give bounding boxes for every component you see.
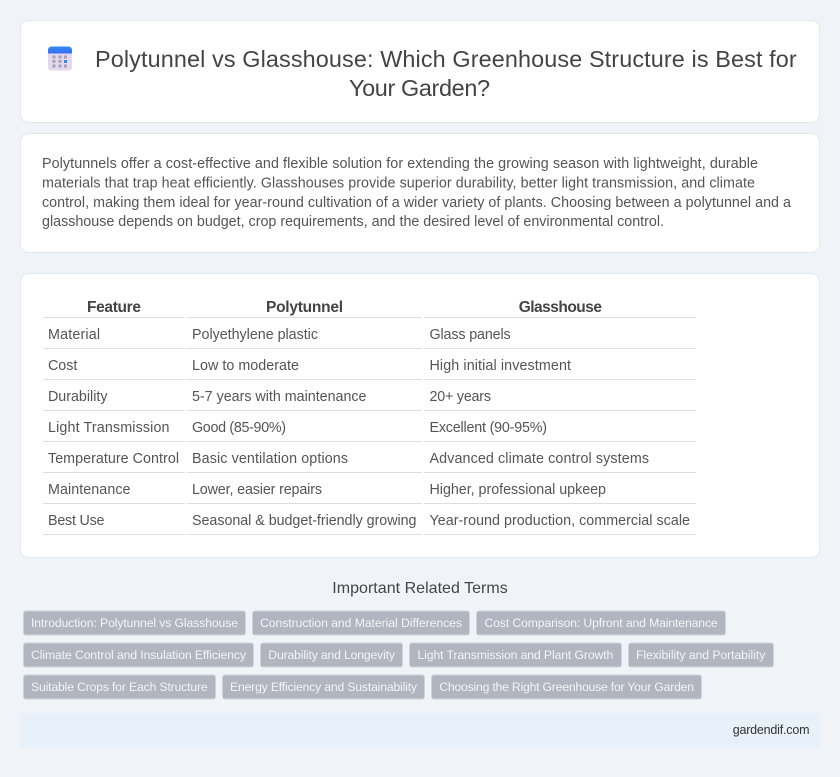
table header: Polytunnel (266, 299, 343, 316)
chip (628, 643, 774, 667)
chip (24, 643, 254, 667)
table header (87, 299, 602, 316)
text block: introduction paragraph: glasshouse depends on budget, crop requirements, and the desired level of environmental control. (42, 214, 664, 230)
footer: gardendif.com (733, 723, 810, 737)
panel: related terms chips (24, 611, 774, 699)
row: light transmission: Good (85-90%) (192, 420, 286, 436)
chip: Construction and Material Differences (260, 616, 462, 630)
row: best use: Best Use (48, 513, 105, 529)
table header: Feature (87, 299, 141, 316)
panel: header (20, 20, 820, 122)
title: Your Garden? (349, 75, 490, 101)
chip (260, 643, 402, 667)
row: temperature control: Advanced climate control systems (430, 451, 649, 467)
text block: introduction paragraph: Polytunnels offer a cost-effective and flexible solution for extending the growing season with lightweight, durable (42, 156, 758, 172)
chip: Cost Comparison: Upfront and Maintenance (484, 616, 718, 630)
row: best use (48, 513, 690, 529)
row: material: Material (48, 327, 100, 343)
row: maintenance (48, 482, 606, 498)
chip: Energy Efficiency and Sustainability (230, 680, 418, 694)
chip (432, 675, 702, 699)
text block: introduction paragraph: control, making them ideal for year-round cultivation of a wider variety of plants. Choosing between a polytunnel and a (42, 195, 791, 211)
row: material (48, 327, 511, 343)
icon: calendar (48, 46, 72, 70)
row: durability: Durability (48, 389, 108, 405)
panel: comparison table (20, 274, 820, 558)
chip (222, 675, 424, 699)
row: material: Glass panels (430, 327, 511, 343)
heading: important related terms: Important Related Terms (332, 580, 508, 597)
row: durability: 20+ years (430, 389, 491, 405)
row: cost: Low to moderate (192, 358, 299, 374)
chip: Choosing the Right Greenhouse for Your Garden (439, 680, 694, 694)
row: temperature control: Temperature Control (48, 451, 179, 467)
row: durability (48, 389, 491, 405)
row: temperature control (48, 451, 649, 467)
row: light transmission: Excellent (90-95%) (430, 420, 547, 436)
chip: Introduction: Polytunnel vs Glasshouse (31, 616, 238, 630)
chip (24, 675, 216, 699)
table header: Glasshouse (519, 299, 602, 316)
row: maintenance: Higher, professional upkeep (430, 482, 606, 498)
chip (24, 611, 246, 635)
chip: Light Transmission and Plant Growth (418, 648, 613, 662)
row: light transmission: Light Transmission (48, 420, 170, 436)
row: cost: Cost (48, 358, 77, 374)
text block: introduction paragraph: materials that trap heat efficiently. Glasshouses provide superior durability, better light transmission, and climate (42, 176, 755, 192)
chip: Flexibility and Portability (636, 648, 766, 662)
text block: introduction paragraph (42, 156, 791, 230)
row: material: Polyethylene plastic (192, 327, 318, 343)
chip: Durability and Longevity (268, 648, 396, 662)
row: maintenance: Lower, easier repairs (192, 482, 322, 498)
row: temperature control: Basic ventilation options (192, 451, 348, 467)
row: cost: High initial investment (430, 358, 571, 374)
panel: introduction (20, 134, 820, 252)
row: maintenance: Maintenance (48, 482, 131, 498)
chip (252, 611, 470, 635)
row: best use: Year-round production, commercial scale (430, 513, 690, 529)
row: cost (48, 358, 571, 374)
footer (20, 713, 820, 747)
chip (476, 611, 726, 635)
row: durability: 5-7 years with maintenance (192, 389, 367, 405)
row: best use: Seasonal & budget-friendly growing (192, 513, 417, 529)
row: light transmission (48, 420, 547, 436)
title (95, 46, 797, 101)
chip: Suitable Crops for Each Structure (31, 680, 208, 694)
chip: Climate Control and Insulation Efficiency (31, 648, 247, 662)
chip (410, 643, 622, 667)
title: Polytunnel vs Glasshouse: Which Greenhouse Structure is Best for (95, 46, 797, 72)
